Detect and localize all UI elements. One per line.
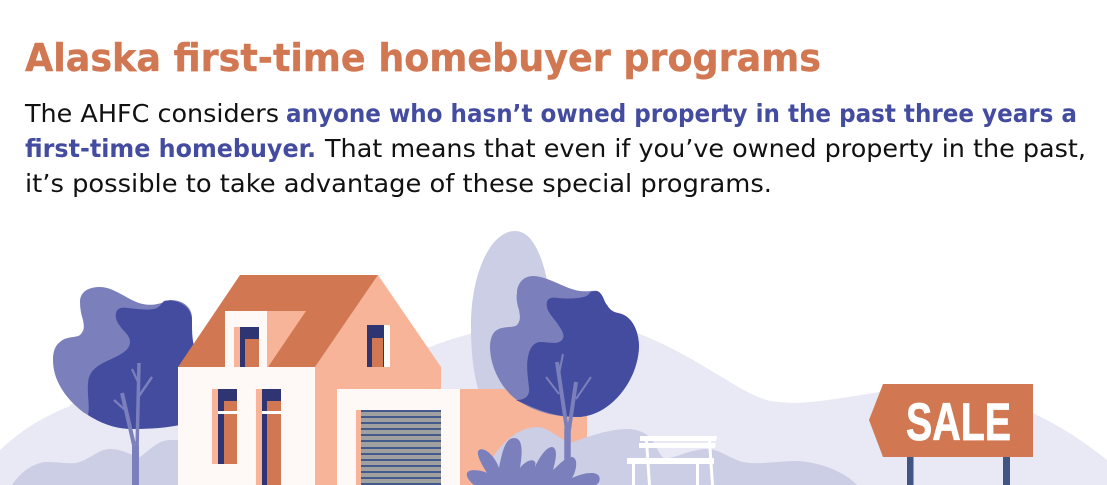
front window right [256, 389, 281, 485]
right wing [441, 389, 587, 485]
background hills [0, 321, 1107, 485]
gable facade [315, 275, 460, 485]
hill patch right of wing [480, 427, 587, 485]
bench [627, 436, 717, 485]
roof [178, 275, 378, 367]
right tree canopy light [490, 276, 639, 417]
title: Alaska first-time homebuyer programs [25, 36, 821, 80]
right tree trunk [546, 354, 591, 462]
intro text block [24, 99, 1086, 198]
front window left [212, 389, 237, 464]
right tree [490, 276, 639, 462]
left tree canopy light [53, 287, 192, 429]
sign posts [907, 457, 1010, 485]
bush [467, 438, 600, 485]
gable window [367, 325, 390, 367]
sign label: SALE [906, 393, 1011, 452]
intro text block: The AHFC considers [24, 99, 279, 128]
sale sign [869, 384, 1033, 485]
background oval tree [471, 231, 560, 395]
intro text block: That means that even if you’ve owned property in the past, [324, 134, 1086, 163]
sign board [869, 384, 1033, 457]
left tree [53, 287, 194, 485]
front wall [178, 367, 315, 485]
garage door [356, 410, 441, 485]
garage frame [337, 389, 460, 485]
dormer [225, 311, 306, 368]
intro text block: first-time homebuyer. [25, 134, 316, 163]
house [178, 275, 587, 485]
foreground hills [12, 427, 857, 485]
intro text block: it’s possible to take advantage of these special programs. [25, 169, 772, 198]
right tree canopy dark [516, 291, 639, 417]
left tree canopy dark [88, 300, 194, 429]
left tree trunk [114, 363, 152, 485]
